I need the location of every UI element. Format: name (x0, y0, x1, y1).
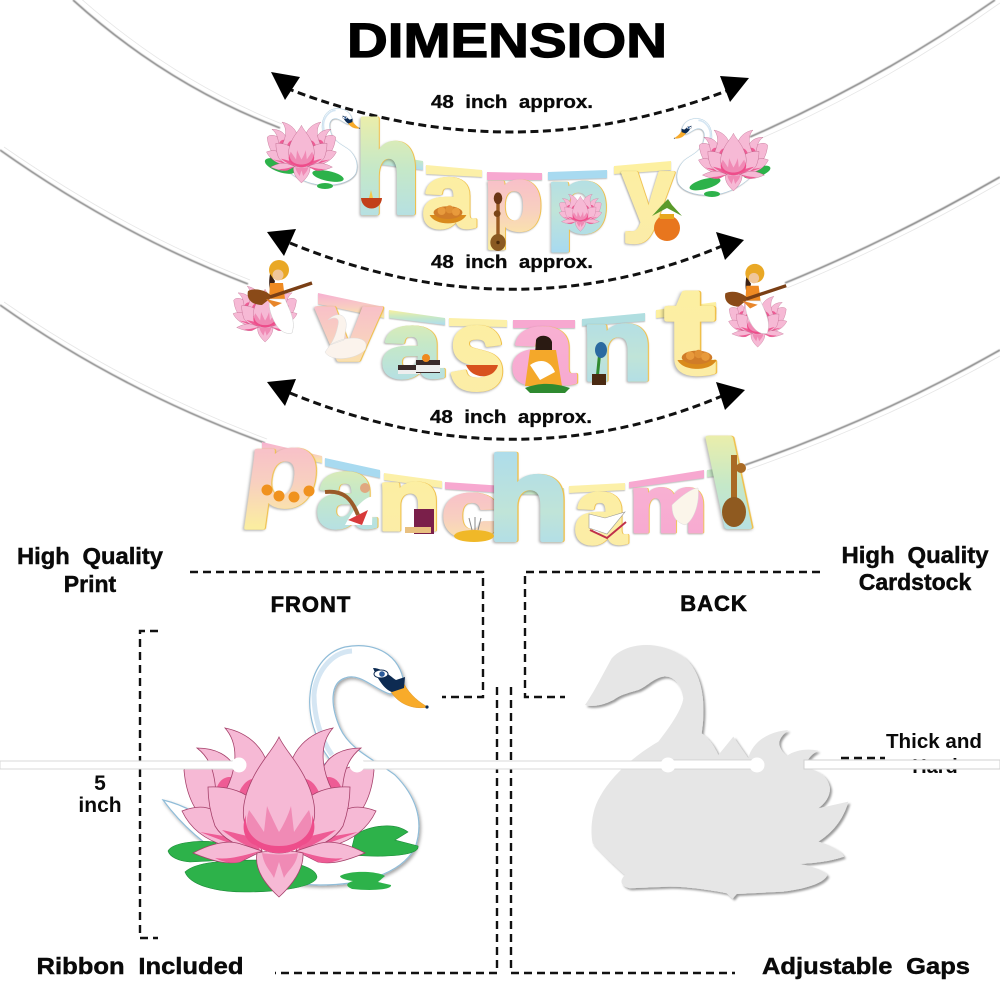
label: thick and hard: Thick and (886, 731, 982, 753)
banner: happy: a (422, 146, 475, 247)
title: DIMENSION (347, 15, 667, 68)
icon: goddess on lotus left (233, 260, 312, 342)
banner: panchami: l (693, 417, 766, 553)
front swan and lotus piece (163, 646, 429, 897)
banner: happy: p (546, 149, 608, 252)
icon: swan (672, 488, 698, 525)
icon: peacock plant (592, 342, 607, 385)
label: adjustable gaps: Adjustable Gaps (762, 953, 970, 979)
banner: happy: p (483, 149, 543, 249)
banner: vasant: a (511, 291, 575, 405)
heading: front: FRONT (271, 592, 351, 617)
width arrow row 2 (267, 229, 744, 289)
width arrow row 3 (267, 379, 745, 439)
label: 5 inch (78, 772, 122, 817)
hanging string 1 (73, 0, 1000, 141)
icon: girl with sari (525, 336, 570, 393)
width arrow row 3: 48 inch approx. (430, 407, 592, 427)
banner: panchami (238, 410, 766, 565)
icon: kalash (652, 199, 682, 241)
banner: happy (263, 97, 772, 252)
label: thick and hard (886, 731, 982, 778)
banner: vasant: s (449, 284, 505, 414)
banner: happy: y (622, 137, 674, 243)
hanging string 3 (0, 302, 1000, 470)
width arrow row 1: 48 inch approx. (431, 92, 593, 112)
left swan and lotus (263, 109, 360, 189)
icon: laddoo bowl (430, 205, 466, 223)
width arrow row 2: 48 inch approx. (431, 252, 593, 272)
icon: marigolds (262, 484, 314, 502)
icon: open book (589, 512, 626, 538)
banner: panchami: m (629, 458, 707, 549)
icon: white swan (325, 315, 366, 359)
label: high quality cardstock: High Quality (842, 542, 989, 568)
icon: veena (490, 192, 506, 251)
icon: laddoo plate (677, 350, 717, 369)
label: high quality print: Print (64, 571, 117, 597)
banner: vasant (233, 260, 787, 414)
banner: vasant: t (665, 263, 715, 400)
heading: back: BACK (680, 591, 748, 616)
ribbon through cutouts (0, 758, 1000, 772)
label: 5 inch: inch (78, 794, 122, 817)
icon: veena large (722, 455, 746, 527)
icon: goddess on lotus right (725, 264, 787, 347)
banner: panchami: a (574, 458, 627, 563)
width arrow row 1 (271, 72, 749, 132)
icon: books (398, 354, 440, 374)
banner: panchami: n (377, 452, 441, 549)
icon: maroon book (405, 509, 434, 534)
banner: panchami: a (316, 437, 376, 548)
banner: vasant: a (381, 293, 444, 397)
label: high quality cardstock: Cardstock (859, 569, 971, 595)
banner: panchami: h (487, 432, 569, 565)
banner: vasant: n (581, 288, 653, 402)
icon: incense plate (454, 517, 494, 542)
banner: panchami: c (441, 464, 500, 554)
icon: bowl (466, 365, 498, 376)
label: thick and hard: Hard (912, 756, 958, 778)
label: high quality print (17, 543, 163, 597)
icon: lotus (559, 194, 602, 231)
icon: diya (361, 190, 382, 208)
label: 5 inch: 5 (94, 772, 106, 795)
icon: woman with veena (325, 483, 373, 525)
banner: vasant: v (316, 271, 382, 381)
right swan and lotus (674, 119, 772, 197)
label: high quality print: High Quality (17, 543, 163, 569)
callout leaders (140, 572, 885, 973)
hanging string 2 (0, 147, 1000, 288)
banner: panchami: p (238, 410, 328, 528)
label: high quality cardstock (842, 542, 989, 595)
banner: happy: h (355, 97, 420, 241)
label: ribbon included: Ribbon Included (36, 953, 244, 979)
back of swan piece (585, 645, 848, 899)
